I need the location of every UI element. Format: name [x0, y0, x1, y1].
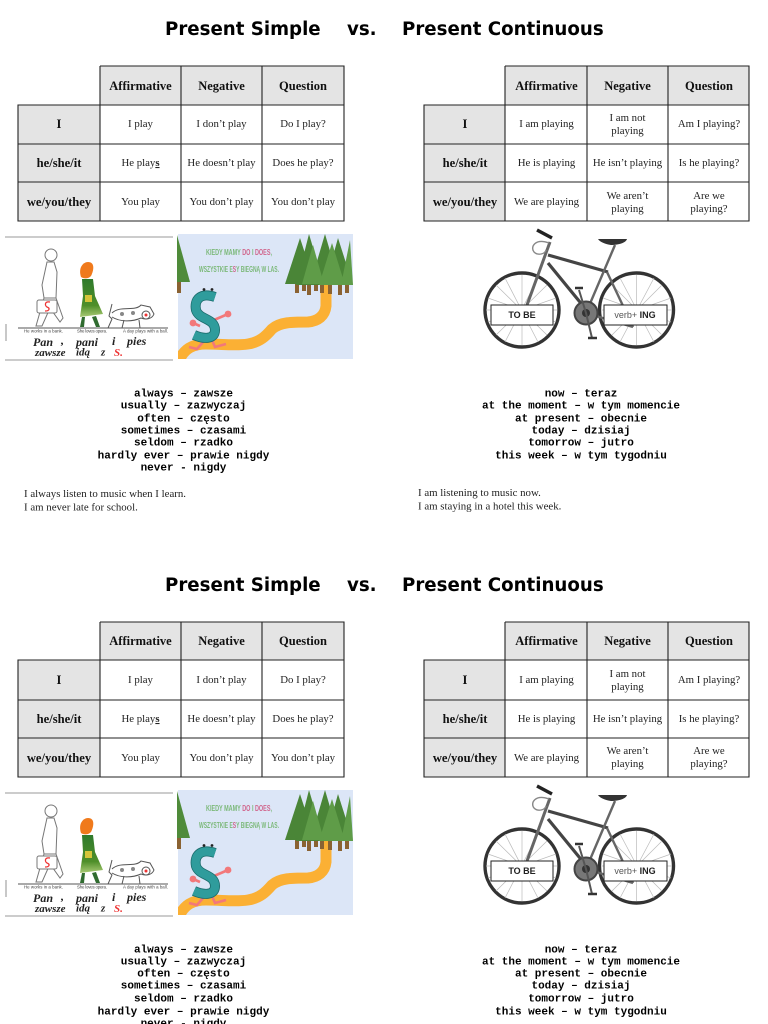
table: present simple [18, 622, 344, 777]
list: frequency adverbs: often – często [137, 413, 230, 425]
list: frequency adverbs: hardly ever – prawie nigdy [98, 450, 270, 462]
section: second worksheet copy [5, 575, 749, 1024]
illustration: man, woman and dog: , [60, 333, 64, 347]
illustration: bicycle: verb+ ING [614, 310, 656, 320]
table: present simple: we/you/they [27, 751, 92, 765]
table: present continuous: Is he playing? [679, 157, 739, 169]
list: frequency adverbs [98, 388, 270, 474]
examples: present simple [24, 488, 186, 514]
illustration: man, woman and dog: pies [126, 890, 147, 904]
table: present simple: Question [279, 79, 327, 93]
table: present continuous: Negative [604, 634, 651, 648]
table: present simple: He doesn’t play [187, 157, 256, 169]
list: frequency adverbs: never - nigdy [141, 462, 227, 474]
table: present continuous: He is playing [518, 713, 576, 725]
list: time expressions: today – dzisiaj [531, 425, 631, 437]
table: present simple: I [57, 117, 62, 131]
list: frequency adverbs: sometimes – czasami [121, 980, 247, 992]
table: present continuous: playing [611, 125, 644, 137]
title: Present Continuous [402, 19, 604, 40]
illustration: running letter S: WSZYSTKIE ESY BIEGNĄ W LAS. [199, 821, 279, 830]
list: frequency adverbs: often – często [137, 968, 230, 980]
illustration: running letter S [177, 790, 353, 917]
table: present continuous: I am not [610, 668, 645, 680]
title: vs. [347, 575, 377, 596]
list: time expressions: at the moment – w tym momencie [482, 956, 680, 968]
illustration: man, woman and dog: Pan [33, 891, 53, 905]
table: present continuous: we/you/they [433, 751, 498, 765]
table: present continuous: Question [685, 79, 733, 93]
list: time expressions: at the moment – w tym momencie [482, 400, 680, 412]
table: present continuous: playing [611, 681, 644, 693]
table: present continuous: playing [611, 203, 644, 215]
table: present simple: Does he play? [272, 157, 334, 169]
list: frequency adverbs: usually – zazwyczaj [121, 400, 246, 412]
illustration: bicycle: verb+ ING [614, 866, 656, 876]
illustration: running letter S: KIEDY MAMY DO I DOES, [206, 248, 272, 257]
list: time expressions: at present – obecnie [515, 413, 647, 425]
table: present continuous: Are we [693, 745, 725, 757]
list: time expressions: this week – w tym tygodniu [495, 450, 667, 462]
table: present simple: I don’t play [196, 674, 247, 686]
illustration: man, woman and dog: idą [76, 346, 91, 358]
illustration: man, woman and dog: A day plays with a ball. [123, 328, 168, 334]
illustration: man, woman and dog: Pan [33, 335, 53, 349]
table: present simple: You don’t play [189, 196, 254, 208]
table: present simple: You play [121, 752, 160, 764]
list: time expressions: tomorrow – jutro [528, 993, 634, 1005]
table: present simple: I [57, 673, 62, 687]
table: present simple: You don’t play [189, 752, 254, 764]
table: present continuous: Question [685, 634, 733, 648]
table: present simple: we/you/they [27, 195, 92, 209]
list: time expressions: today – dzisiaj [531, 980, 631, 992]
illustration: bicycle: TO BE [508, 866, 536, 876]
list: frequency adverbs: seldom – rzadko [134, 993, 233, 1005]
table: present continuous: I am not [610, 112, 645, 124]
table: present simple: I play [128, 118, 154, 130]
table: present continuous: Am I playing? [678, 118, 740, 130]
table: present continuous: We are playing [514, 196, 580, 208]
illustration: running letter S: KIEDY MAMY DO I DOES, [206, 804, 272, 813]
table: present simple: I play [128, 674, 154, 686]
table: present continuous: I [463, 673, 468, 687]
table: present simple: You play [121, 196, 160, 208]
table: present simple: he/she/it [37, 712, 82, 726]
illustration: man, woman and dog: A day plays with a ball. [123, 884, 168, 890]
table: present simple: Affirmative [109, 79, 172, 93]
table: present continuous: Are we [693, 190, 725, 202]
illustration: man, woman and dog: pies [126, 334, 147, 348]
illustration: man, woman and dog: S. [114, 347, 123, 359]
list: time expressions [482, 388, 680, 462]
illustration: running letter S: WSZYSTKIE ESY BIEGNĄ W LAS. [199, 265, 279, 274]
list: time expressions: at present – obecnie [515, 968, 647, 980]
table: present continuous: He isn’t playing [593, 157, 663, 169]
table: present continuous: playing [611, 758, 644, 770]
list: frequency adverbs: sometimes – czasami [121, 425, 247, 437]
table: present simple: Does he play? [272, 713, 334, 725]
illustration: man, woman and dog: He works in a bank. [24, 884, 63, 890]
list: frequency adverbs: seldom – rzadko [134, 437, 233, 449]
table: present continuous: We aren’t [607, 190, 648, 202]
list: frequency adverbs: hardly ever – prawie nigdy [98, 1006, 270, 1018]
examples: present continuous: I am listening to music now. [418, 487, 541, 499]
illustration: man, woman and dog: z [100, 902, 106, 914]
list: frequency adverbs: always – zawsze [134, 388, 233, 400]
table: present continuous: Negative [604, 79, 651, 93]
table: present continuous [424, 66, 749, 221]
list: frequency adverbs [98, 944, 270, 1024]
title: Present Continuous [402, 575, 604, 596]
table: present simple: he/she/it [37, 156, 82, 170]
table: present simple: Negative [198, 79, 245, 93]
table: present continuous: I [463, 117, 468, 131]
illustration: bicycle [485, 230, 674, 347]
illustration: running letter S [177, 234, 353, 361]
table: present simple: Do I play? [280, 674, 326, 686]
table: present continuous: Affirmative [515, 79, 578, 93]
illustration: bicycle [485, 786, 674, 903]
table: present continuous: He isn’t playing [593, 713, 663, 725]
table: present continuous: Is he playing? [679, 713, 739, 725]
illustration: man, woman and dog: zawsze [34, 347, 66, 359]
illustration: man, woman and dog: i [112, 334, 116, 348]
illustration: man, woman and dog: , [60, 889, 64, 903]
illustration: bicycle: TO BE [508, 310, 536, 320]
table: present simple: Question [279, 634, 327, 648]
table: present simple: I don’t play [196, 118, 247, 130]
list: time expressions: now – teraz [545, 944, 617, 956]
table: present continuous [424, 622, 749, 777]
section: first worksheet copy [5, 19, 749, 514]
title [165, 19, 604, 40]
title: vs. [347, 19, 377, 40]
table: present continuous: We are playing [514, 752, 580, 764]
table: present simple: He plays [121, 713, 160, 725]
table: present simple: Do I play? [280, 118, 326, 130]
table: present simple: Negative [198, 634, 245, 648]
list: time expressions: tomorrow – jutro [528, 437, 634, 449]
table: present continuous: he/she/it [443, 156, 488, 170]
table: present continuous: playing? [690, 758, 728, 770]
title: Present Simple [165, 19, 321, 40]
list: frequency adverbs: usually – zazwyczaj [121, 956, 246, 968]
table: present simple: You don’t play [271, 752, 336, 764]
table: present continuous: I am playing [519, 118, 574, 130]
illustration: man, woman and dog: zawsze [34, 903, 66, 915]
table: present continuous: playing? [690, 203, 728, 215]
table: present continuous: Affirmative [515, 634, 578, 648]
illustration: man, woman and dog: z [100, 346, 106, 358]
list: time expressions: now – teraz [545, 388, 617, 400]
title: Present Simple [165, 575, 321, 596]
illustration: man, woman and dog: She loves opera. [77, 884, 107, 890]
table: present simple: He plays [121, 157, 160, 169]
table: present continuous: Am I playing? [678, 674, 740, 686]
illustration: man, woman and dog: He works in a bank. [24, 328, 63, 334]
illustration: man, woman and dog: pani [75, 891, 99, 905]
illustration: man, woman and dog: i [112, 890, 116, 904]
table: present continuous: We aren’t [607, 745, 648, 757]
table: present continuous: He is playing [518, 157, 576, 169]
examples: present continuous [418, 487, 561, 512]
table: present continuous: we/you/they [433, 195, 498, 209]
examples: present simple: I always listen to music when I learn. [24, 488, 186, 500]
table: present simple [18, 66, 344, 221]
title [165, 575, 604, 596]
list: frequency adverbs: always – zawsze [134, 944, 233, 956]
table: present simple: You don’t play [271, 196, 336, 208]
illustration: man, woman and dog: pani [75, 335, 99, 349]
examples: present simple: I am never late for school. [24, 502, 138, 514]
illustration: man, woman and dog: idą [76, 902, 91, 914]
table: present continuous: he/she/it [443, 712, 488, 726]
list: time expressions [482, 944, 680, 1018]
table: present simple: Affirmative [109, 634, 172, 648]
list: time expressions: this week – w tym tygodniu [495, 1006, 667, 1018]
table: present continuous: I am playing [519, 674, 574, 686]
table: present simple: He doesn’t play [187, 713, 256, 725]
illustration: man, woman and dog [5, 793, 173, 916]
illustration: man, woman and dog [5, 237, 173, 360]
illustration: man, woman and dog: She loves opera. [77, 328, 107, 334]
examples: present continuous: I am staying in a hotel this week. [418, 500, 561, 512]
illustration: man, woman and dog: S. [114, 903, 123, 915]
